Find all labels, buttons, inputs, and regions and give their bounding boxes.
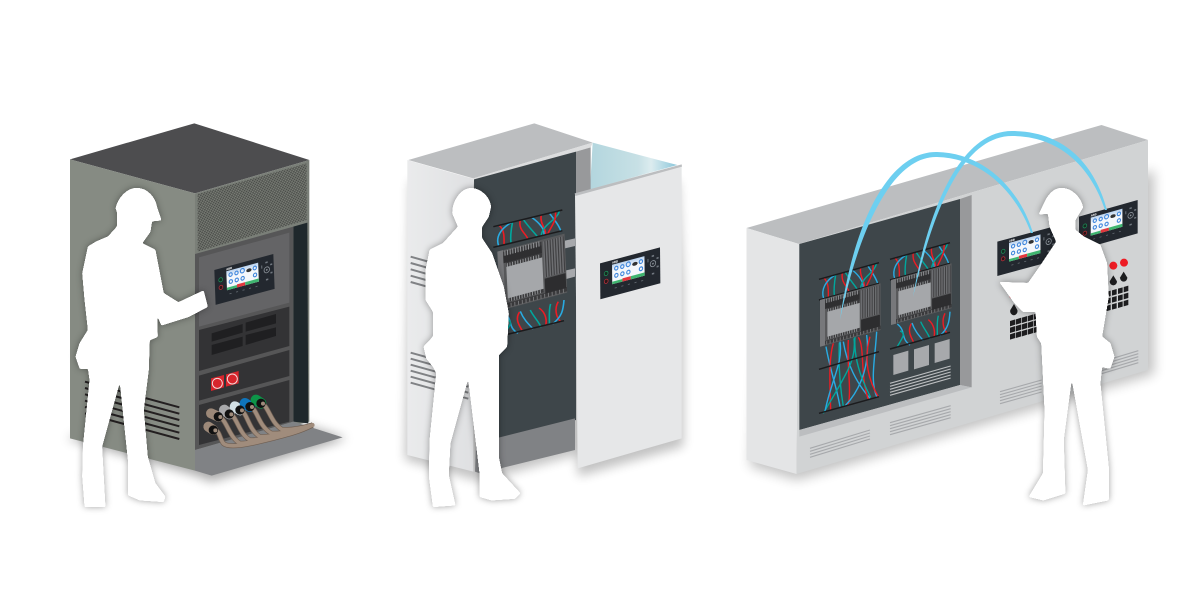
wiring bay [799,195,972,457]
side vents [411,257,468,399]
interior floor [475,418,575,473]
power cables and connectors [208,399,313,446]
controller module [497,234,567,311]
left side panel [407,160,473,472]
stripe block [890,366,951,395]
cabinet shadow [750,170,1154,480]
cabinet 1: closed enclosure with cable entry [67,123,347,507]
label squares [893,339,950,375]
display panel [199,233,289,327]
interior back panel [474,152,576,443]
top face [408,123,593,178]
door top edge [575,164,682,196]
right face frame [195,160,309,450]
bay back panel [799,199,960,430]
wires left upper [819,263,879,300]
vent slots [85,382,179,439]
left face [70,159,195,471]
worker silhouette with tablet [1000,188,1114,505]
controller module left [820,283,881,347]
top lip [473,143,593,181]
cabinet 3: wall-mounted long enclosure [746,125,1154,505]
emergency button panel [199,350,289,401]
door [575,165,682,468]
wireless link arc 2 [913,131,1107,297]
controller display right [1079,200,1138,250]
wires right upper [890,243,950,280]
DIN rails [565,238,575,279]
bay lower lip [799,385,972,437]
controller display left [997,226,1056,276]
top face [70,123,309,193]
cable floor [195,422,343,476]
mesh grille [198,163,307,252]
equipment bay [195,227,293,450]
lower wiring [495,300,564,337]
operator controls [997,188,1138,505]
wireless link arc 1 [840,152,1033,320]
bay side wall [960,195,972,387]
end face [746,228,799,474]
cabinet 2: open door enclosure [405,123,683,507]
top face [746,125,1148,244]
lower vents [810,406,951,457]
dark side strip [293,223,308,423]
wires right lower [890,312,950,349]
worker silhouette [424,188,520,507]
front face [796,140,1148,474]
controller display [600,247,660,299]
wires left lower bundle [819,332,879,413]
worker silhouette [76,188,207,507]
upper wiring [493,210,562,247]
controller display [214,254,275,305]
cable entry panel [199,380,289,445]
vent panel [199,307,289,371]
glass roof [590,143,677,189]
controller module right [891,263,952,325]
interior right wall [576,147,591,195]
lower right vents [1000,351,1138,404]
left button cluster [1009,291,1039,340]
right button cluster [1106,259,1128,311]
